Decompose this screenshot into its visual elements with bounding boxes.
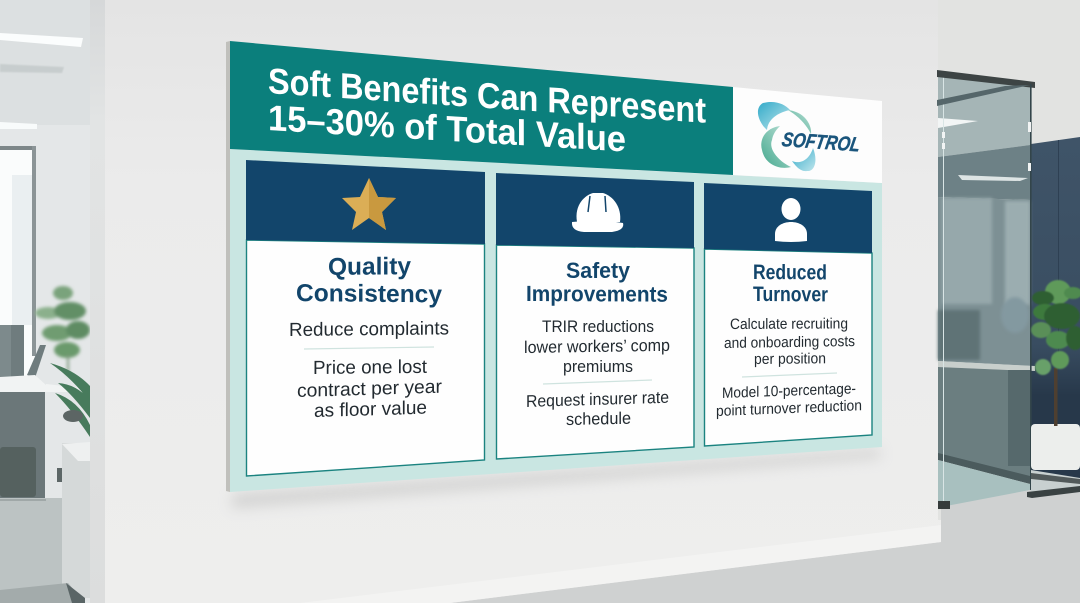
heading xyxy=(526,258,668,307)
heading: Reduced xyxy=(753,261,827,284)
icon: star xyxy=(342,178,396,230)
title: Soft Benefits Can Represent xyxy=(268,60,706,131)
body text: per position xyxy=(754,350,826,368)
heading: Improvements xyxy=(526,281,668,307)
body text: and onboarding costs xyxy=(724,333,855,352)
sign shadow xyxy=(232,449,880,508)
body text: Request insurer rate xyxy=(526,388,669,411)
logo panel xyxy=(733,87,882,183)
body text: schedule xyxy=(566,409,631,429)
body text: lower workers’ comp xyxy=(524,336,670,357)
background: right floor strip and plant xyxy=(938,280,1080,509)
body text: Model 10-percentage- xyxy=(722,380,856,402)
title xyxy=(268,60,706,159)
panel: safety improvements xyxy=(496,173,694,459)
icon: person xyxy=(775,198,807,242)
body text: TRIR reductions xyxy=(542,317,654,336)
body text: Calculate recruiting xyxy=(730,315,848,333)
heading: Safety xyxy=(566,258,631,283)
background: baseboard xyxy=(300,525,941,603)
panel: quality consistency xyxy=(246,160,485,476)
heading xyxy=(753,261,828,306)
header band xyxy=(230,41,733,175)
logo swirl xyxy=(758,102,815,171)
body text: as floor value xyxy=(314,398,427,422)
heading: Turnover xyxy=(753,283,828,306)
body text xyxy=(524,317,670,429)
heading: Consistency xyxy=(296,280,442,308)
sign board xyxy=(226,41,882,492)
background: wall pillar xyxy=(90,0,105,603)
body text xyxy=(716,315,862,420)
body text: Price one lost xyxy=(313,357,428,379)
logo wordmark: SOFTROL xyxy=(780,129,862,156)
icon: hard hat xyxy=(572,193,623,232)
title: 15–30% of Total Value xyxy=(268,97,626,159)
background: floor xyxy=(450,486,1080,603)
heading: Quality xyxy=(328,253,411,281)
body text: Reduce complaints xyxy=(289,318,449,341)
background: left office view xyxy=(0,0,90,603)
body text: contract per year xyxy=(297,377,443,402)
background: right glass partition xyxy=(937,0,1080,520)
body text xyxy=(289,318,449,422)
body text: point turnover reduction xyxy=(716,397,862,420)
office plant xyxy=(35,286,90,375)
panel: reduced turnover xyxy=(704,183,872,446)
body text: premiums xyxy=(563,357,633,376)
heading xyxy=(296,253,442,308)
